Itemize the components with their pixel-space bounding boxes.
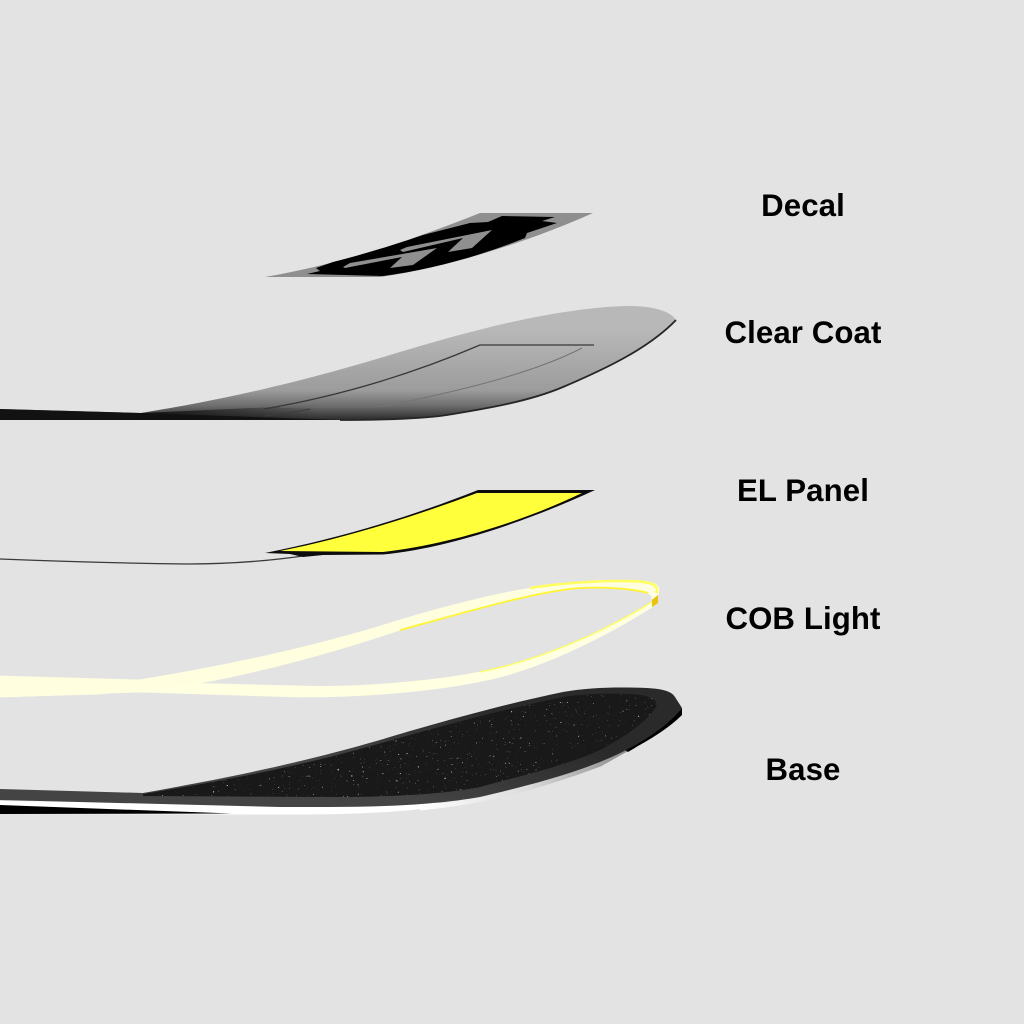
label: Base: Base (766, 752, 840, 787)
base carbon panel (143, 694, 656, 797)
decal outline emboss (264, 345, 594, 409)
layer: Base (0, 685, 682, 815)
label: EL Panel: EL Panel (737, 473, 869, 508)
layer: EL Panel (0, 490, 595, 564)
sparkles (154, 694, 656, 797)
COB end cap (652, 595, 658, 607)
layer: COB Light (0, 580, 659, 697)
label: Clear Coat: Clear Coat (725, 315, 881, 350)
layer: Clear Coat (0, 306, 676, 420)
label: Decal: Decal (761, 188, 845, 223)
base underside (0, 801, 440, 815)
exploded layer diagram (0, 193, 881, 814)
layer: Decal (265, 213, 593, 277)
upper strand (0, 580, 659, 697)
label: COB Light: COB Light (725, 601, 881, 636)
lower strand (0, 602, 652, 697)
EL panel thin trailing edge (0, 555, 310, 564)
base top rim (0, 687, 682, 807)
